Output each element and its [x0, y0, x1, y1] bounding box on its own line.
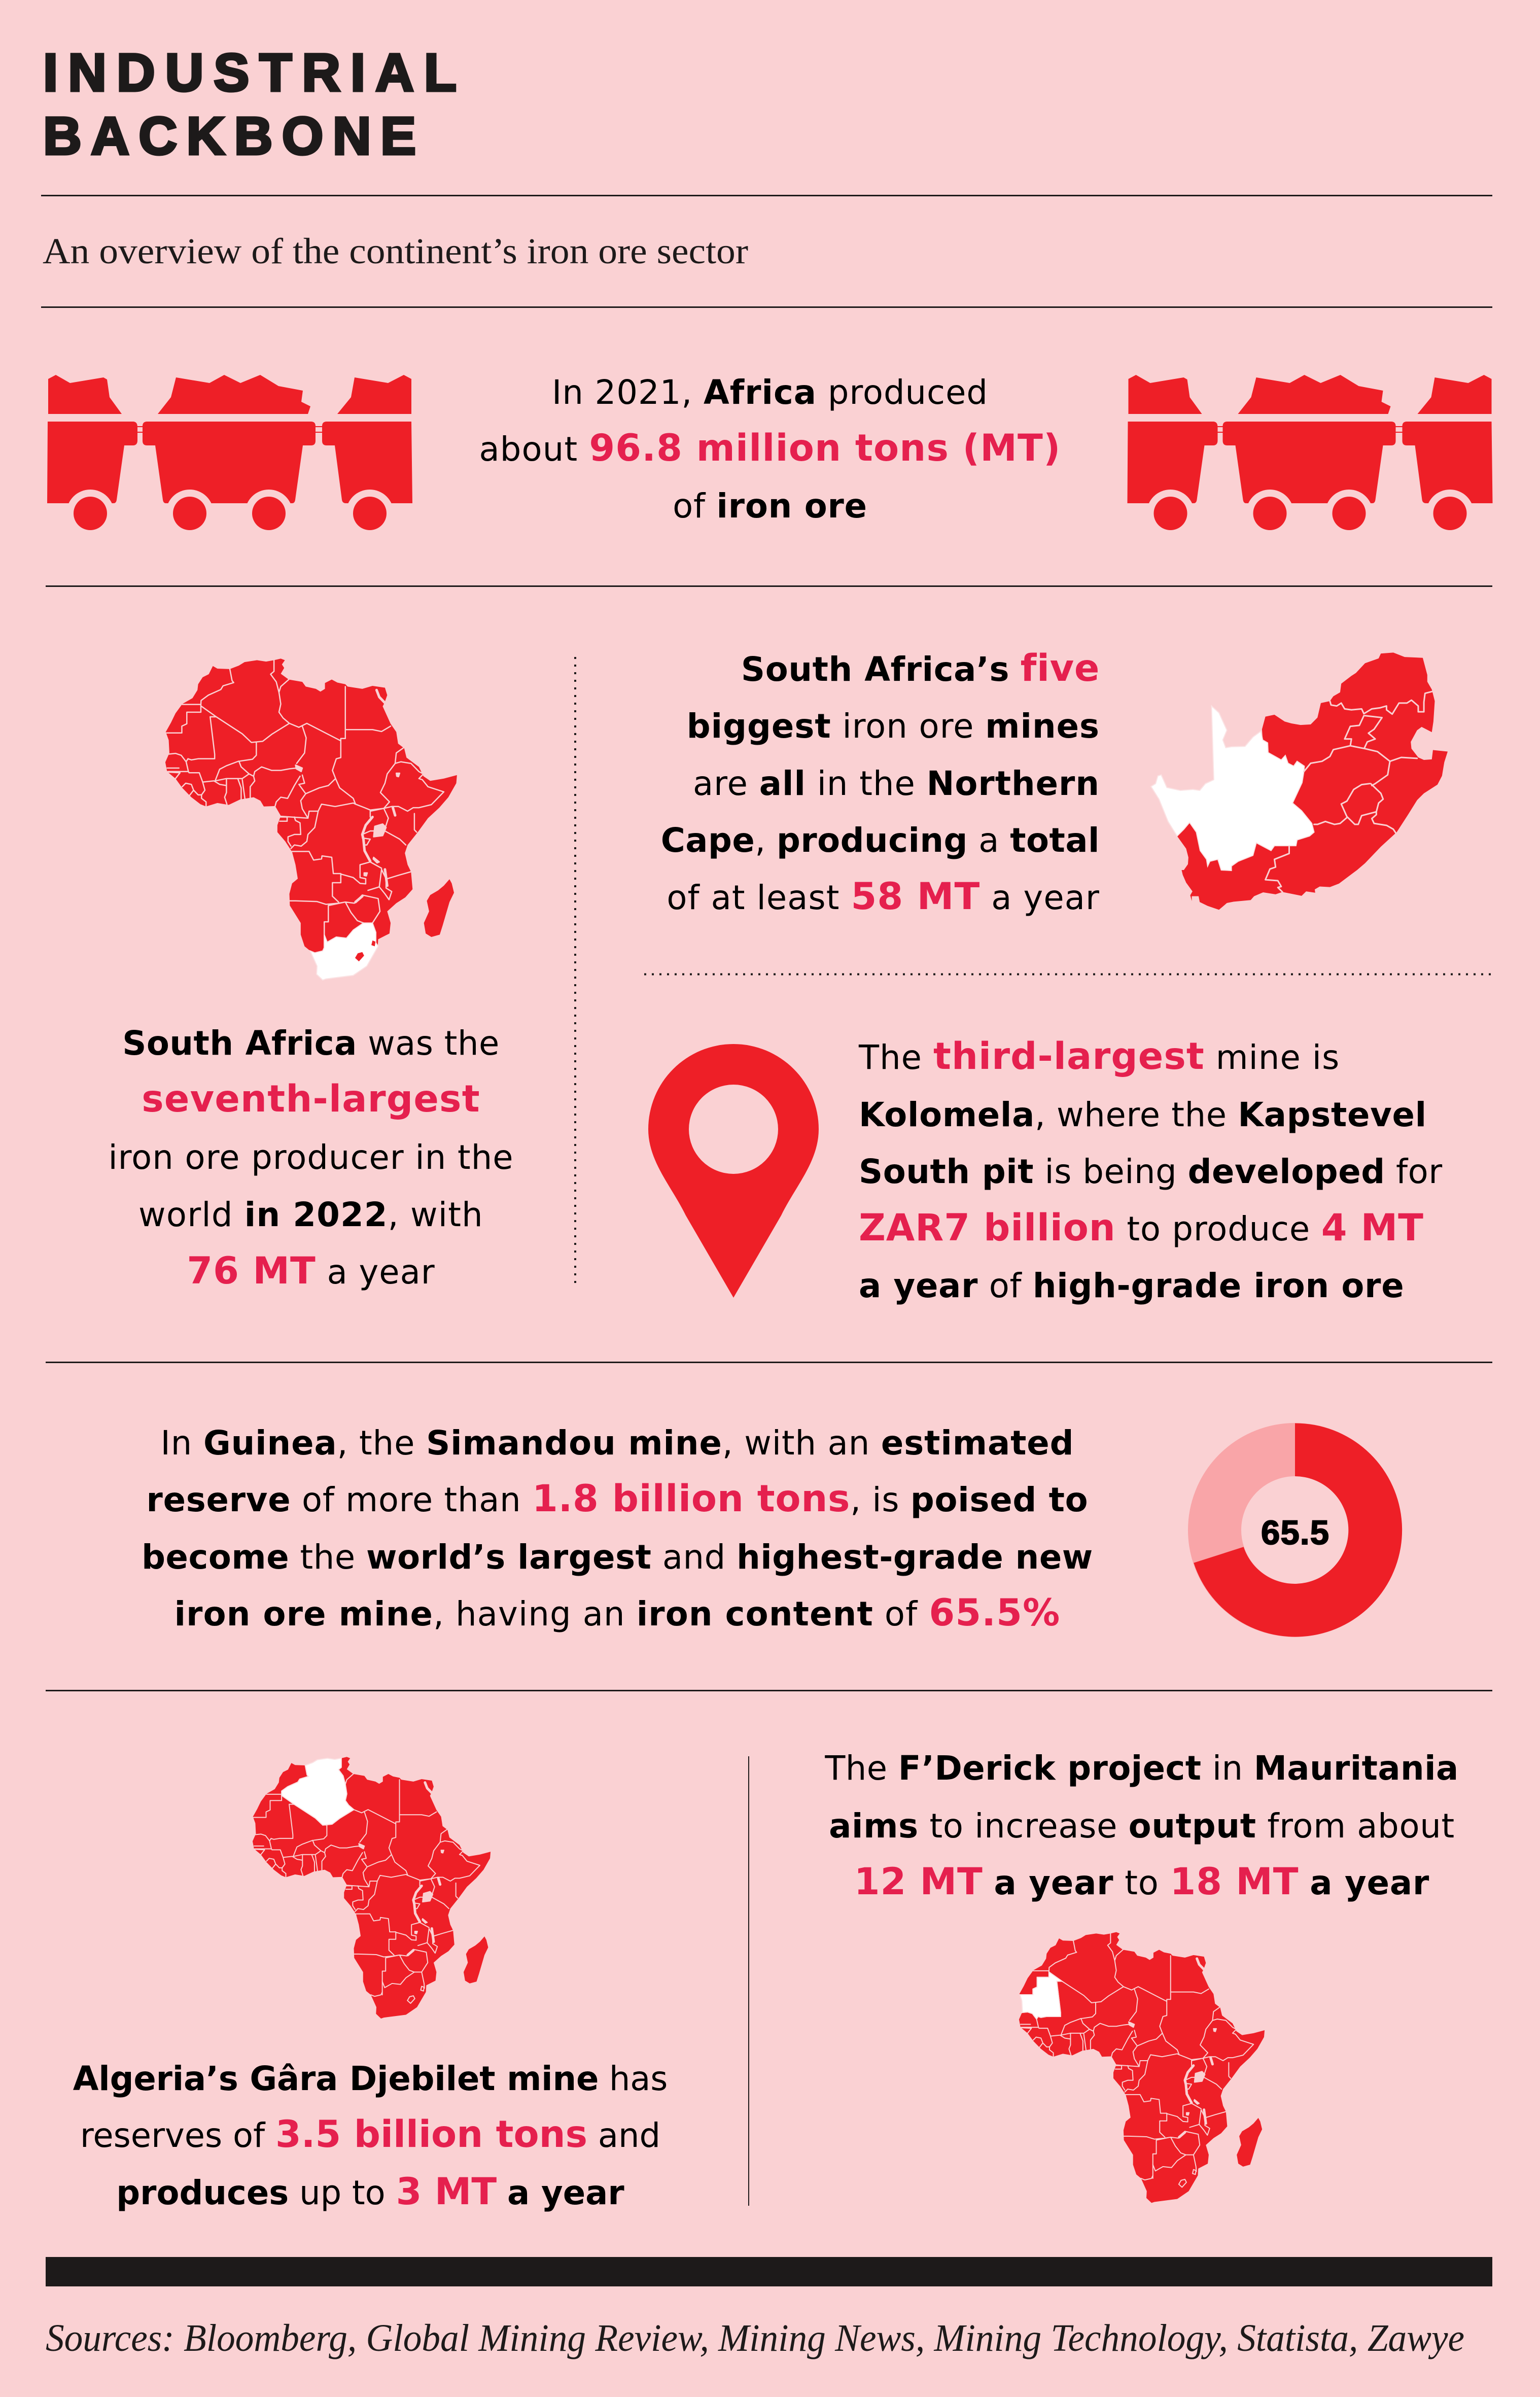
sources: Sources: Bloomberg, Global Mining Review, Mining News, Mining Technology, Statista, Zawye [46, 2317, 1464, 2359]
panel: F'Derick text: The F’Derick project in Mauritania [824, 1749, 1459, 1788]
panel: Northern Cape text: Cape, producing a total [661, 821, 1100, 860]
Algeria highlight [282, 1758, 354, 1825]
donut value: 65.5 [1261, 1514, 1329, 1552]
panel: South Africa seventh-largest text: world in 2022, with [138, 1196, 483, 1234]
panel: South Africa seventh-largest text [108, 1024, 514, 1293]
panel: Simandou text [142, 1424, 1093, 1635]
panel: South Africa seventh-largest text: South Africa was the [122, 1024, 500, 1063]
map: South Africa with Northern Cape highlighted [1151, 652, 1448, 910]
icon: mine carts right [1127, 375, 1492, 537]
panel: Algeria text: reserves of 3.5 billion tons and [80, 2113, 660, 2156]
panel: Simandou text: reserve of more than 1.8 billion tons, is poised to [147, 1477, 1088, 1520]
panel: Algeria text: produces up to 3 MT a year [116, 2170, 624, 2213]
panel: Northern Cape text: of at least 58 MT a year [667, 875, 1100, 918]
icon: mine carts left [47, 375, 412, 537]
panel: Simandou text: iron ore mine, having an iron content of 65.5% [174, 1591, 1060, 1635]
South Africa highlight [310, 923, 378, 980]
footer bar [46, 2257, 1492, 2286]
panel: Kolomela text: The third-largest mine is [858, 1035, 1340, 1078]
panel: Northern Cape text: biggest iron ore mines [687, 707, 1100, 746]
map: Africa with Mauritania highlighted [1019, 1932, 1265, 2203]
panel: South Africa seventh-largest text: seventh-largest [142, 1078, 480, 1121]
title [43, 43, 457, 166]
panel: Kolomela text: South pit is being developed for [859, 1153, 1443, 1191]
panel: South Africa seventh-largest text: iron ore producer in the [108, 1138, 514, 1177]
panel: Kolomela text: a year of high-grade iron ore [859, 1267, 1404, 1305]
donut chart: 65.5 [1194, 1423, 1402, 1637]
panel: F'Derick text: aims to increase output from about [829, 1807, 1455, 1846]
panel: South Africa seventh-largest text: 76 MT a year [187, 1249, 435, 1293]
icon: location pin [648, 1044, 819, 1298]
panel: Simandou text: In Guinea, the Simandou mine, with an estimated [161, 1424, 1074, 1463]
panel: production headline: of iron ore [673, 487, 867, 526]
panel: Kolomela text: Kolomela, where the Kapstevel [859, 1096, 1427, 1134]
title: INDUSTRIAL [43, 43, 457, 102]
panel: Northern Cape text: South Africa’s five [741, 647, 1100, 690]
panel: Northern Cape text: are all in the Northern [693, 765, 1100, 803]
subtitle: An overview of the continent’s iron ore sector [43, 231, 748, 271]
panel: Kolomela text: ZAR7 billion to produce 4 MT [859, 1206, 1424, 1249]
panel: F'Derick text [824, 1749, 1459, 1903]
provincial borders [1266, 691, 1432, 892]
panel: F'Derick text: 12 MT a year to 18 MT a year [854, 1860, 1429, 1903]
panel: production headline: about 96.8 million tons (MT) [479, 427, 1061, 470]
Mauritania highlight [1020, 1972, 1062, 2019]
panel: Kolomela text [858, 1035, 1443, 1305]
panel: Simandou text: become the world’s largest and highest-grade new [142, 1538, 1093, 1577]
Northern Cape highlight [1151, 706, 1314, 871]
title: BACKBONE [43, 107, 416, 166]
map: Africa with South Africa highlighted [165, 658, 457, 980]
panel: production headline [479, 373, 1061, 526]
panel: production headline: In 2021, Africa produced [552, 373, 988, 412]
panel: Algeria text [73, 2060, 668, 2213]
panel: Algeria text: Algeria’s Gâra Djebilet mine has [73, 2060, 668, 2098]
map: Africa with Algeria highlighted [253, 1757, 491, 2019]
panel: Northern Cape text [661, 647, 1100, 918]
